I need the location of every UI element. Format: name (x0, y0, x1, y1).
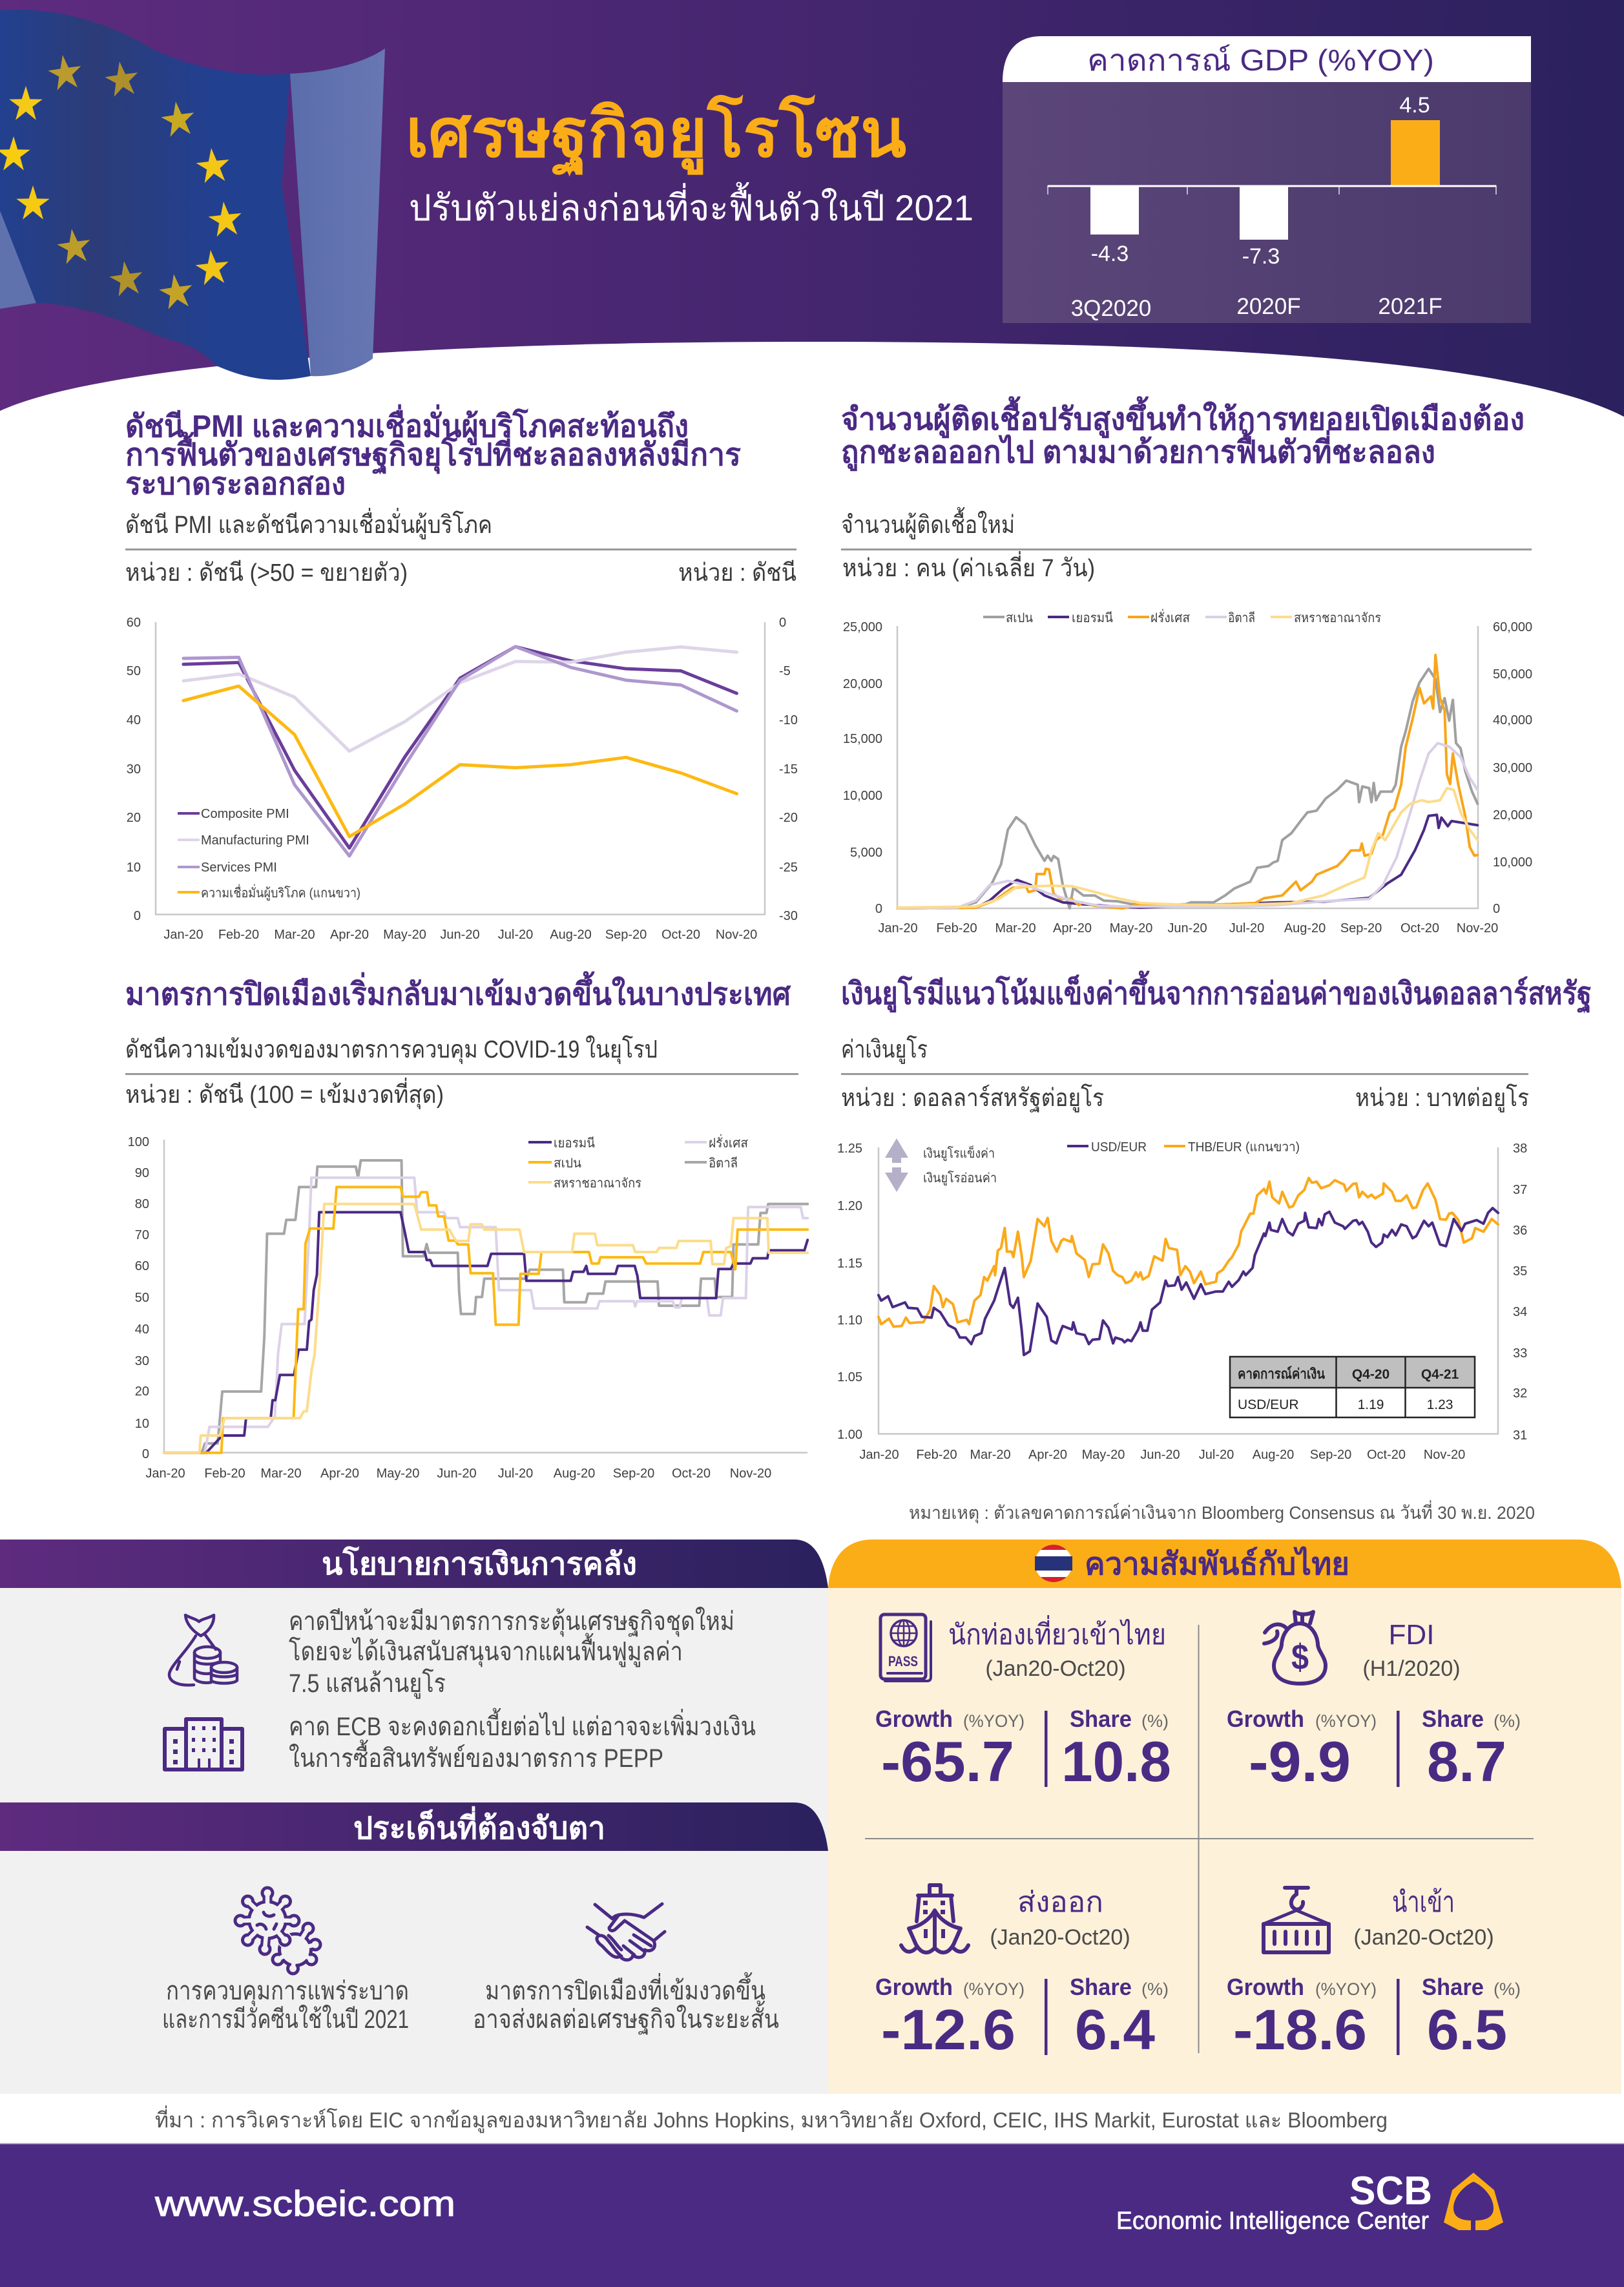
legend: อิตาลี (709, 1156, 738, 1171)
line chart: stringency: 0 (142, 1447, 149, 1461)
subtitle: ปรับตัวแย่ลงก่อนที่จะฟื้นตัวในปี 2021 (409, 182, 973, 228)
line chart: USD/EUR and THB/EUR: Jun-20 (1140, 1448, 1180, 1462)
legend: THB/EUR (แกนขวา) (1188, 1140, 1300, 1154)
line chart: PMI: Aug-20 (550, 928, 592, 942)
legend: สหราชอาณาจักร (554, 1176, 641, 1191)
cell: FDI: (H1/2020) (1362, 1656, 1461, 1681)
cell: tourists (875, 1614, 1171, 1793)
line chart: PMI: May-20 (383, 928, 426, 942)
line chart: stringency: Oct-20 (672, 1467, 711, 1481)
line chart: PMI: Oct-20 (661, 928, 700, 942)
legend (1067, 1140, 1300, 1154)
arrows: euro strength: เงินยูโรอ่อนค่า (923, 1171, 997, 1186)
line chart: infections: Jan-20 (878, 921, 918, 935)
line chart: infections: 10,000 (1493, 855, 1532, 870)
cell: exports: Growth (875, 1974, 953, 2000)
unit: หน่วย : ดัชนี (100 = เข้มงวดที่สุด) (125, 1078, 444, 1109)
text: stimulus (289, 1606, 734, 1698)
legend: ฝรั่งเศส (1150, 609, 1190, 625)
footnote: หมายเหตุ : ตัวเลขคาดการณ์ค่าเงินจาก Bloomberg Consensus ณ วันที่ 30 พ.ย. 2020 (909, 1500, 1535, 1524)
cell: imports: นำเข้า (1392, 1886, 1455, 1918)
legend: เยอรมนี (1072, 611, 1113, 625)
cell: tourists: 10.8 (1061, 1729, 1171, 1793)
section title: ประเด็นที่ต้องจับตา (353, 1806, 605, 1846)
left unit: หน่วย : ดอลลาร์สหรัฐต่อยูโร (841, 1083, 1104, 1112)
section title: นโยบายการเงินการคลัง (322, 1545, 637, 1582)
line chart: PMI (127, 616, 798, 942)
chart subtitle: จำนวนผู้ติดเชื้อใหม่ (841, 506, 1015, 539)
panel: issues to watch (0, 1802, 829, 2094)
cell: exports: ส่งออก (1017, 1886, 1103, 1918)
line chart: stringency: Sep-20 (613, 1467, 654, 1481)
cell: tourists: (%YOY) (963, 1711, 1025, 1731)
line chart: stringency: 10 (135, 1417, 149, 1431)
text: ECB: คาด ECB จะคงดอกเบี้ยต่อไป แต่อาจจะเพิ่มวงเงิน (289, 1707, 756, 1741)
line chart: PMI: 50 (127, 664, 141, 678)
forecast table: USD/EUR (1238, 1397, 1299, 1412)
line chart: PMI: Nov-20 (716, 928, 757, 942)
line chart: USD/EUR and THB/EUR: May-20 (1082, 1448, 1125, 1462)
text: stimulus: คาดปีหน้าจะมีมาตรการกระตุ้นเศรษฐกิจชุดใหม่ (289, 1606, 734, 1637)
legend: ฝรั่งเศส (709, 1134, 748, 1151)
legend: Composite PMI (201, 807, 289, 821)
line chart: USD/EUR and THB/EUR: Mar-20 (970, 1448, 1011, 1462)
line chart: infections: Feb-20 (936, 921, 977, 935)
line chart: USD/EUR and THB/EUR: 37 (1513, 1183, 1527, 1197)
line chart: USD/EUR and THB/EUR: 1.15 (837, 1257, 862, 1271)
icon: dollar bag (1264, 1612, 1326, 1684)
line chart: USD/EUR and THB/EUR: 35 (1513, 1264, 1527, 1279)
chart subtitle: ดัชนี PMI และดัชนีความเชื่อมั่นผู้บริโภค (125, 508, 492, 539)
GDP bar chart: 4.5 (1399, 93, 1430, 118)
left unit: หน่วย : ดัชนี (>50 = ขยายตัว) (125, 559, 408, 587)
line chart: USD/EUR and THB/EUR: Aug-20 (1253, 1448, 1294, 1462)
GDP bar chart: -7.3 (1242, 244, 1280, 269)
cell: FDI: FDI (1389, 1619, 1434, 1651)
line chart: infections: 20,000 (1493, 808, 1532, 822)
right unit: หน่วย : ดัชนี (678, 559, 796, 587)
line chart: PMI: -20 (779, 811, 798, 825)
line chart: USD/EUR and THB/EUR: 1.00 (837, 1428, 862, 1442)
panel: PMI and consumer confidence (125, 404, 798, 942)
section header (828, 1540, 1621, 1588)
legend: Manufacturing PMI (201, 833, 309, 848)
section header (0, 1802, 828, 1851)
Economic Intelligence Center: Economic Intelligence Center (1116, 2208, 1429, 2235)
cell: FDI: (%YOY) (1315, 1711, 1377, 1731)
cell: imports (1227, 1886, 1521, 2062)
icon: dollar bag: $ (1291, 1636, 1309, 1677)
cell: exports: -12.6 (881, 1998, 1015, 2062)
text: ECB: ในการซื้อสินทรัพย์ของมาตรการ PEPP (289, 1739, 663, 1773)
text: lockdown impact: อาจส่งผลต่อเศรษฐกิจในระยะสั้น (473, 2000, 779, 2035)
cell: imports: (Jan20-Oct20) (1353, 1925, 1494, 1950)
line chart: infections: 60,000 (1493, 620, 1532, 634)
icon: ship (901, 1885, 968, 1952)
line chart: stringency: 60 (135, 1259, 149, 1273)
line chart: infections: Apr-20 (1053, 921, 1092, 935)
line chart: stringency: 20 (135, 1384, 149, 1399)
section header (0, 1540, 828, 1588)
forecast table: Q4-21 (1421, 1367, 1459, 1382)
line chart: stringency: Jul-20 (498, 1467, 533, 1481)
line chart: PMI: 20 (127, 811, 141, 825)
chart subtitle: ค่าเงินยูโร (841, 1035, 928, 1064)
heading: ถูกชะลอออกไป ตามมาด้วยการฟื้นตัวที่ชะลอลง (841, 429, 1435, 472)
cell: tourists: นักท่องเที่ยวเข้าไทย (948, 1614, 1166, 1651)
line chart: infections: 10,000 (843, 789, 882, 803)
line chart: stringency: Jan-20 (145, 1467, 185, 1481)
cell: tourists: Share (1070, 1706, 1132, 1732)
line chart: stringency: 80 (135, 1197, 149, 1211)
line chart: infections: 0 (1493, 902, 1500, 916)
line chart: PMI: -15 (779, 762, 798, 777)
main title: เศรษฐกิจยูโรโซน (406, 94, 906, 178)
source line: ที่มา : การวิเคราะห์โดย EIC จากข้อมูลของมหาวิทยาลัย Johns Hopkins, มหาวิทยาลัย Oxford, CEIC, IHS Markit, Eurostat และ Bloomberg (155, 2105, 1388, 2133)
legend: ความเชื่อมั่นผู้บริโภค (แกนขวา) (201, 884, 360, 901)
line chart: stringency: May-20 (377, 1467, 419, 1481)
line chart: USD/EUR and THB/EUR: Sep-20 (1310, 1448, 1351, 1462)
icon: handshake (587, 1904, 665, 1960)
cell: imports: (%YOY) (1315, 1979, 1377, 1999)
line chart: stringency: 70 (135, 1228, 149, 1242)
cell: exports: 6.4 (1075, 1998, 1155, 2062)
cell: exports: (%YOY) (963, 1979, 1025, 1999)
icon: Thai flag (1035, 1545, 1072, 1582)
line chart: PMI: Apr-20 (330, 928, 369, 942)
legend: อิตาลี (1228, 611, 1255, 625)
cell: imports: Share (1422, 1974, 1484, 2000)
line chart: PMI: 30 (127, 762, 141, 777)
line chart: USD/EUR and THB/EUR: Feb-20 (916, 1448, 957, 1462)
section title: ความสัมพันธ์กับไทย (1085, 1545, 1349, 1582)
line chart: stringency: 90 (135, 1166, 149, 1180)
line chart: PMI: Jun-20 (440, 928, 480, 942)
footer (0, 2143, 1624, 2287)
line chart: infections: 15,000 (843, 732, 882, 746)
GDP heading: คาดการณ์ GDP (%YOY) (1087, 43, 1434, 77)
legend (983, 609, 1381, 625)
GDP bar chart: 2021F (1378, 294, 1442, 319)
cell: exports: Share (1070, 1974, 1132, 2000)
icon: passport: PASS (888, 1653, 918, 1669)
line chart: infections: Jul-20 (1229, 921, 1264, 935)
EU flag (0, 10, 385, 380)
line chart: infections: 25,000 (843, 620, 882, 634)
heading: ระบาดระลอกสอง (125, 467, 346, 501)
line chart: infections: Aug-20 (1284, 921, 1326, 935)
line chart: infections: 0 (875, 902, 882, 916)
forecast table: 1.19 (1358, 1397, 1384, 1412)
line chart: infections: Jun-20 (1167, 921, 1207, 935)
text: pandemic control: และการมีวัคซีนใช้ในปี 2021 (162, 2004, 409, 2034)
line chart: PMI: Sep-20 (605, 928, 647, 942)
line chart: stringency (128, 1134, 807, 1481)
panel: monetary and fiscal policy (0, 1540, 829, 1853)
legend: สเปน (554, 1156, 581, 1171)
cell: imports: Growth (1227, 1974, 1304, 2000)
text: stimulus: 7.5 แสนล้านยูโร (289, 1669, 446, 1698)
text: pandemic control (162, 1977, 409, 2034)
line chart: PMI: 0 (779, 616, 786, 630)
icon: buildings (165, 1719, 242, 1770)
line chart: USD/EUR and THB/EUR: 34 (1513, 1305, 1527, 1319)
line chart: infections: May-20 (1110, 921, 1152, 935)
header background (0, 0, 1624, 426)
line chart: stringency: 50 (135, 1291, 149, 1305)
line chart: infections: Sep-20 (1340, 921, 1382, 935)
line chart: stringency: Mar-20 (260, 1467, 302, 1481)
line chart: USD/EUR and THB/EUR: Jan-20 (859, 1448, 899, 1462)
line chart: infections: 20,000 (843, 677, 882, 691)
cell: tourists: -65.7 (881, 1729, 1014, 1793)
cell: FDI: Share (1422, 1706, 1484, 1732)
line chart: stringency: Aug-20 (554, 1467, 595, 1481)
line chart: USD/EUR and THB/EUR: Apr-20 (1028, 1448, 1067, 1462)
line chart: stringency: Feb-20 (204, 1467, 245, 1481)
white page body (0, 342, 1624, 1551)
text: lockdown impact: มาตรการปิดเมืองที่เข้มงวดขึ้น (485, 1972, 765, 2005)
line chart: infections (843, 609, 1532, 935)
line chart: USD/EUR and THB/EUR: 1.05 (837, 1370, 862, 1384)
line chart: infections: 5,000 (850, 846, 882, 860)
chart subtitle: ดัชนีความเข้มงวดของมาตรการควบคุม COVID-19 ในยุโรป (125, 1035, 658, 1064)
line chart: PMI: 60 (127, 616, 141, 630)
icon: money bag with coins (169, 1615, 237, 1685)
cell: imports: -18.6 (1233, 1998, 1367, 2062)
line chart: USD/EUR and THB/EUR: Nov-20 (1424, 1448, 1465, 1462)
line chart: PMI: Mar-20 (274, 928, 315, 942)
heading: การฟื้นตัวของเศรษฐกิจยุโรปที่ชะลอลงหลังมีการ (125, 432, 741, 475)
cell: tourists: (Jan20-Oct20) (985, 1656, 1126, 1681)
line chart: PMI: -30 (779, 909, 798, 923)
line chart: PMI: 40 (127, 713, 141, 727)
line chart: infections: 50,000 (1493, 667, 1532, 682)
icon: container crane (1264, 1888, 1329, 1952)
legend: USD/EUR (1091, 1140, 1147, 1154)
line chart: USD/EUR and THB/EUR: 33 (1513, 1346, 1527, 1361)
legend (178, 807, 360, 901)
line chart: stringency: 100 (128, 1135, 149, 1149)
line chart: USD/EUR and THB/EUR: 38 (1513, 1142, 1527, 1156)
line chart: infections: Mar-20 (995, 921, 1036, 935)
text: lockdown impact (473, 1972, 779, 2035)
line chart: PMI: -5 (779, 664, 791, 678)
panel: relationship with Thailand (828, 1540, 1621, 2094)
line chart: stringency: 30 (135, 1354, 149, 1368)
line chart: USD/EUR and THB/EUR: 1.25 (837, 1142, 862, 1156)
cell: imports: (%) (1494, 1979, 1521, 1999)
panel: GDP forecast (1003, 36, 1531, 323)
arrows: euro strength: เงินยูโรแข็งค่า (923, 1145, 995, 1162)
heading: จำนวนผู้ติดเชื้อปรับสูงขึ้นทำให้การทยอยเปิดเมืองต้อง (841, 396, 1525, 439)
line chart: PMI: -10 (779, 713, 798, 727)
forecast table (1230, 1357, 1475, 1417)
cell: exports: (%) (1141, 1979, 1169, 1999)
legend: สหราชอาณาจักร (1294, 611, 1381, 625)
icon: SCB logo (1444, 2173, 1503, 2230)
line chart: PMI: 0 (134, 909, 141, 923)
line chart: USD/EUR and THB/EUR: 31 (1513, 1428, 1527, 1443)
line chart: USD/EUR and THB/EUR: 32 (1513, 1386, 1527, 1401)
icon: passport (880, 1614, 931, 1681)
line chart: stringency: Nov-20 (730, 1467, 771, 1481)
SCB wordmark: SCB (1349, 2169, 1432, 2213)
heading: ดัชนี PMI และความเชื่อมั่นผู้บริโภคสะท้อนถึง (125, 404, 689, 446)
line chart: infections: 30,000 (1493, 761, 1532, 775)
line chart: PMI: 10 (127, 861, 141, 875)
line chart: infections: Oct-20 (1400, 921, 1439, 935)
legend: สเปน (1006, 611, 1033, 625)
cell: FDI: (%) (1494, 1711, 1521, 1731)
arrows: euro strength (885, 1138, 997, 1192)
legend: เยอรมนี (554, 1136, 595, 1151)
text: stimulus: โดยจะได้เงินสนับสนุนจากแผนฟื้นฟูมูลค่า (289, 1633, 683, 1667)
cell: imports: 6.5 (1427, 1998, 1507, 2062)
heading (125, 404, 741, 501)
cell: FDI (1227, 1612, 1521, 1793)
line chart: stringency: 40 (135, 1322, 149, 1337)
line chart: stringency: Apr-20 (320, 1467, 359, 1481)
heading (841, 396, 1525, 472)
cell: FDI: 8.7 (1427, 1729, 1506, 1793)
cell: FDI: Growth (1227, 1706, 1304, 1732)
line chart: USD/EUR and THB/EUR (837, 1138, 1527, 1462)
line chart: USD/EUR and THB/EUR: Jul-20 (1199, 1448, 1234, 1462)
forecast table: 1.23 (1427, 1397, 1453, 1412)
forecast table: Q4-20 (1352, 1367, 1390, 1382)
text: pandemic control: การควบคุมการแพร่ระบาด (166, 1977, 409, 2007)
unit: หน่วย : คน (ค่าเฉลี่ย 7 วัน) (842, 551, 1095, 582)
GDP bar chart (1048, 93, 1496, 321)
panel: euro exchange rate (837, 970, 1592, 1524)
text: ECB (289, 1707, 756, 1773)
GDP bar chart: 3Q2020 (1071, 296, 1151, 321)
line chart: PMI: -25 (779, 861, 798, 875)
website: www.scbeic.com (154, 2183, 455, 2224)
panel: COVID-19 stringency (125, 971, 807, 1481)
cell: tourists: Growth (875, 1706, 953, 1732)
line chart: USD/EUR and THB/EUR: 1.10 (837, 1313, 862, 1328)
cell: exports (875, 1885, 1169, 2062)
GDP bar chart: 2020F (1236, 294, 1301, 319)
line chart: infections: 40,000 (1493, 713, 1532, 727)
cell: tourists: (%) (1141, 1711, 1169, 1731)
GDP bar chart: -4.3 (1091, 242, 1129, 266)
line chart: USD/EUR and THB/EUR: 36 (1513, 1224, 1527, 1238)
line chart: PMI: Feb-20 (218, 928, 259, 942)
cell: FDI: -9.9 (1249, 1729, 1351, 1793)
panel: new infections (841, 396, 1532, 935)
line chart: PMI: Jul-20 (498, 928, 533, 942)
legend (528, 1134, 748, 1191)
legend: Services PMI (201, 861, 277, 875)
line chart: USD/EUR and THB/EUR: Oct-20 (1367, 1448, 1406, 1462)
cell: exports: (Jan20-Oct20) (990, 1925, 1130, 1950)
right unit: หน่วย : บาทต่อยูโร (1355, 1083, 1529, 1112)
line chart: stringency: Jun-20 (437, 1467, 477, 1481)
forecast table: คาดการณ์ค่าเงิน (1238, 1366, 1325, 1382)
line chart: infections: Nov-20 (1457, 921, 1498, 935)
line chart: USD/EUR and THB/EUR: 1.20 (837, 1199, 862, 1213)
icon: virus (234, 1886, 322, 1976)
heading: มาตรการปิดเมืองเริ่มกลับมาเข้มงวดขึ้นในบางประเทศ (125, 971, 791, 1012)
line chart: PMI: Jan-20 (163, 928, 203, 942)
